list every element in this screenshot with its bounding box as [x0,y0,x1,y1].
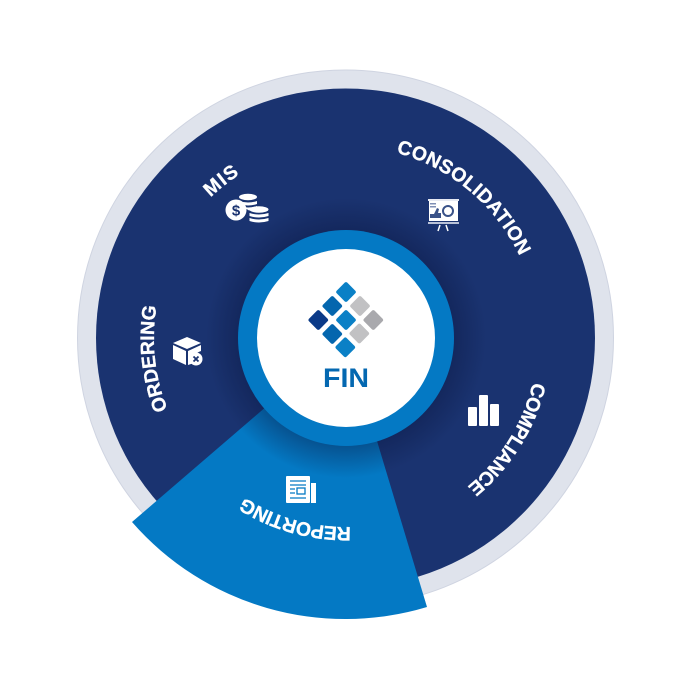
label: ordering: ORDERING [140,306,166,412]
hub blue ring [238,230,454,446]
icon: coins [226,194,268,222]
logo text FIN: FIN [323,363,369,393]
navy disc [96,88,595,588]
highlighted reporting wedge [132,338,427,619]
label: compliance: COMPLIANCE [468,384,545,496]
icon: coins: $ [232,202,241,220]
label: consolidation: CONSOLIDATION [398,141,532,255]
icon: box with x badge [173,337,202,366]
outer pale ring [78,70,614,606]
icon: newspaper [286,476,316,503]
label: reporting: REPORTING [240,500,350,541]
icon: presentation board [428,199,459,231]
icon: bar chart [468,395,499,426]
logo mark [308,281,384,358]
label: mis: MIS [202,165,238,197]
hub shadow [206,198,486,478]
hub white centre [257,249,435,427]
